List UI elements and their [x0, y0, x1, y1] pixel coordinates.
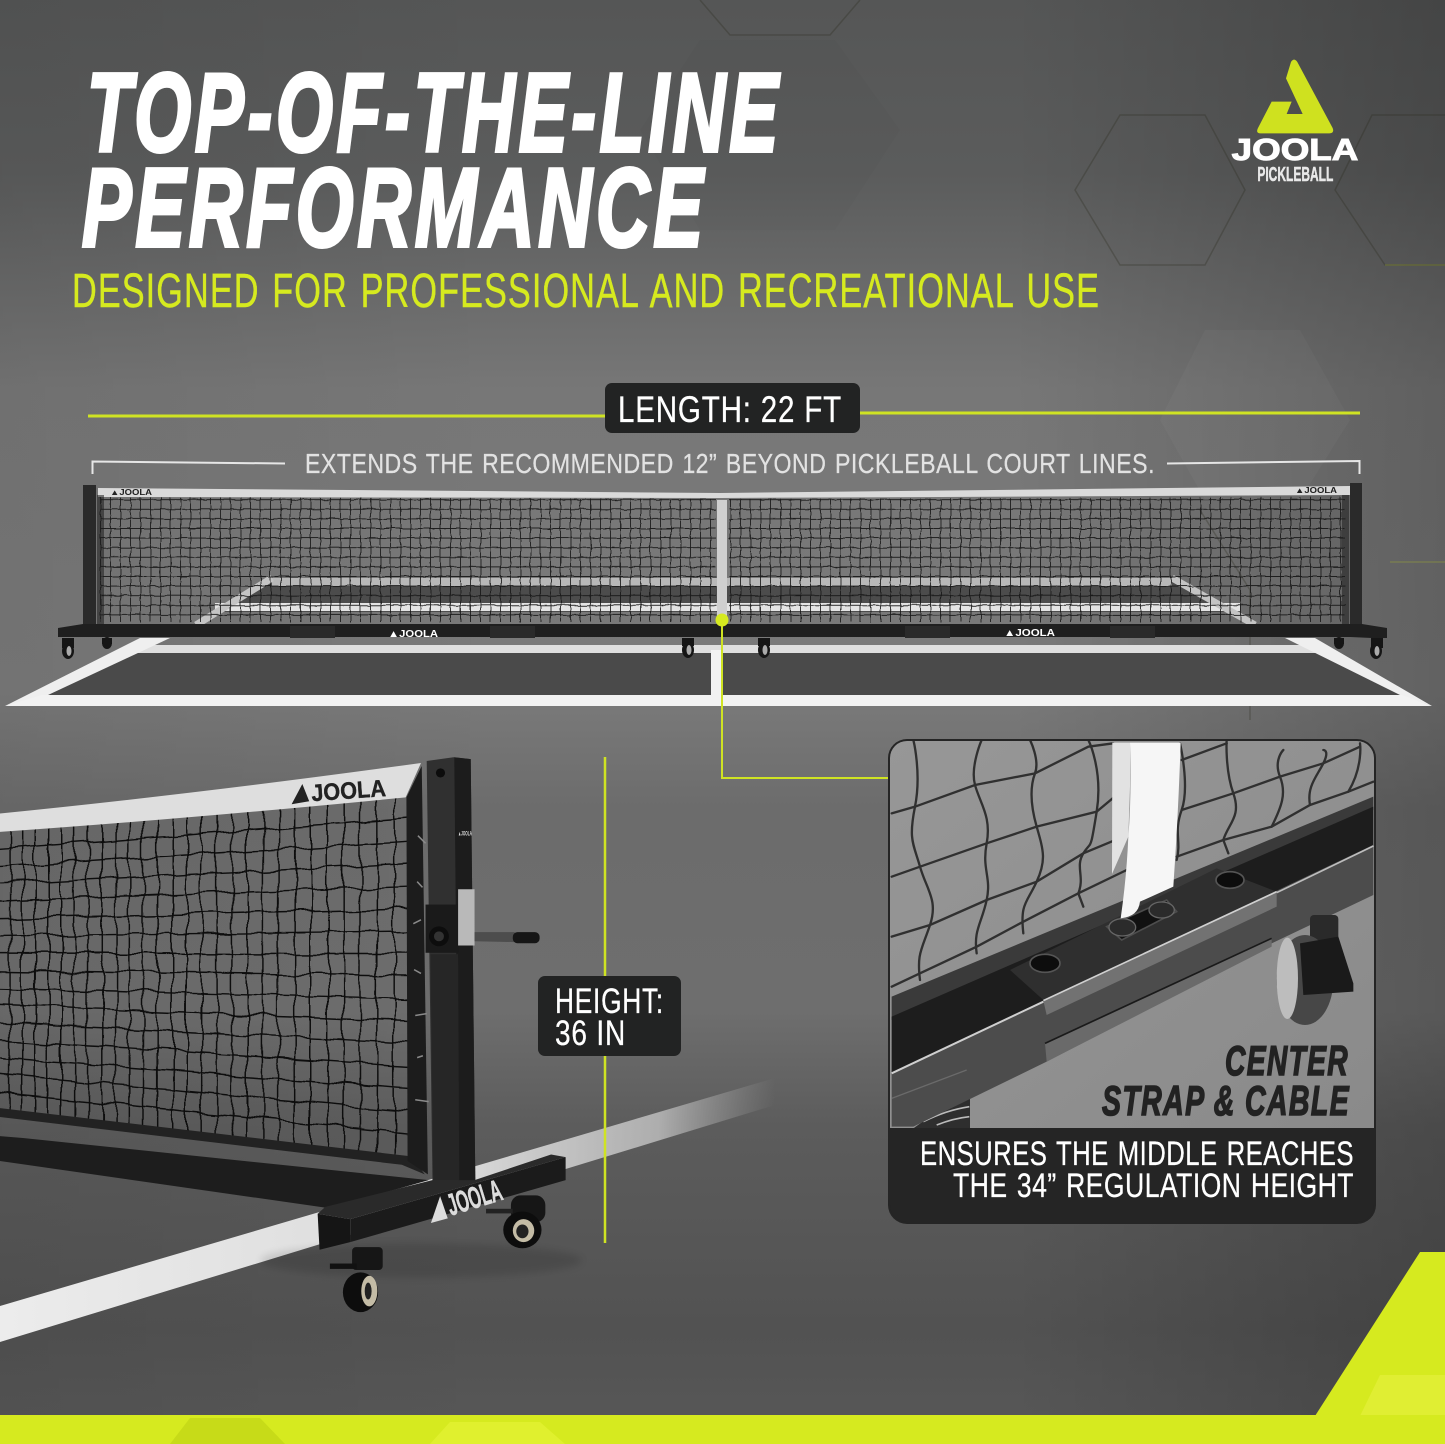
net mesh [100, 497, 1345, 622]
height dimension line [604, 757, 606, 1243]
base beam [0, 1136, 429, 1208]
panel title [1102, 1037, 1350, 1124]
height badge: HEIGHT: [555, 982, 664, 1021]
court lines behind net [196, 578, 1255, 625]
logo: JOOLA Pickleball [1232, 60, 1358, 186]
net bottom binding [0, 1108, 425, 1174]
long net shot: ▲JOOLA [1295, 486, 1337, 495]
foot logo: JOOLA [443, 1174, 506, 1222]
underside bar [1045, 938, 1272, 1062]
height badge [538, 976, 681, 1056]
net side band [406, 766, 429, 1174]
bracket: net extension [92, 448, 1360, 479]
panel description [920, 1135, 1354, 1205]
left caster stem [913, 1097, 970, 1128]
beam top surface [892, 807, 1373, 1073]
panel caption band [890, 1128, 1374, 1131]
post logo: ▲JOOLA [458, 831, 472, 838]
title: PERFORMANCE [82, 146, 707, 270]
net top tape [0, 763, 421, 832]
center strap [717, 500, 727, 624]
tape logo: JOOLA [311, 776, 387, 807]
long net shot: ▲JOOLA [1004, 628, 1055, 639]
long net shot [58, 483, 1387, 659]
clamp [426, 905, 458, 953]
tape logos: ▲JOOLA [110, 488, 152, 497]
panel title: CENTER [1225, 1037, 1349, 1084]
net mesh [0, 798, 408, 1155]
ground shadow [260, 1243, 582, 1278]
height badge: 36 IN [555, 1014, 626, 1053]
logo subline: PICKLEBALL [1257, 164, 1333, 186]
right caster [1277, 915, 1353, 1025]
length dimension line [88, 413, 1360, 416]
net binding [892, 797, 1373, 1020]
ratchet handle [475, 932, 515, 942]
lime corner accent [0, 1252, 1445, 1444]
base logos: ▲JOOLA [388, 629, 438, 640]
logo wordmark: JOOLA [1232, 133, 1358, 167]
net post close-up [0, 757, 582, 1312]
strap [1112, 743, 1130, 874]
metal plate [458, 889, 475, 946]
net top tape [98, 486, 1350, 498]
length badge: LENGTH: 22 FT [618, 389, 842, 430]
base beam [58, 624, 1387, 638]
casters [62, 637, 1383, 659]
icon: JOOLA triangle mark [1257, 60, 1333, 133]
beam front [892, 845, 1373, 1127]
strap plate [1107, 900, 1177, 940]
foot logo [431, 1174, 506, 1223]
front caster [330, 1247, 383, 1312]
panel: center strap and cable [888, 739, 1376, 1224]
length badge [605, 383, 860, 433]
extension note: EXTENDS THE RECOMMENDED 12” BEYOND PICKLEBALL COURT LINES. [305, 448, 1155, 479]
callout connector [716, 614, 888, 778]
post [427, 757, 475, 1181]
floor stripe [0, 1078, 775, 1342]
rear caster [486, 1195, 545, 1248]
T foot [318, 1154, 566, 1219]
close-up net [892, 740, 1373, 987]
title: TOP-OF-THE-LINE [87, 51, 782, 175]
posts [83, 483, 1362, 628]
title [82, 51, 782, 270]
holes [1030, 954, 1060, 972]
court in front of net [5, 638, 1432, 706]
sleeve [1010, 868, 1277, 1000]
